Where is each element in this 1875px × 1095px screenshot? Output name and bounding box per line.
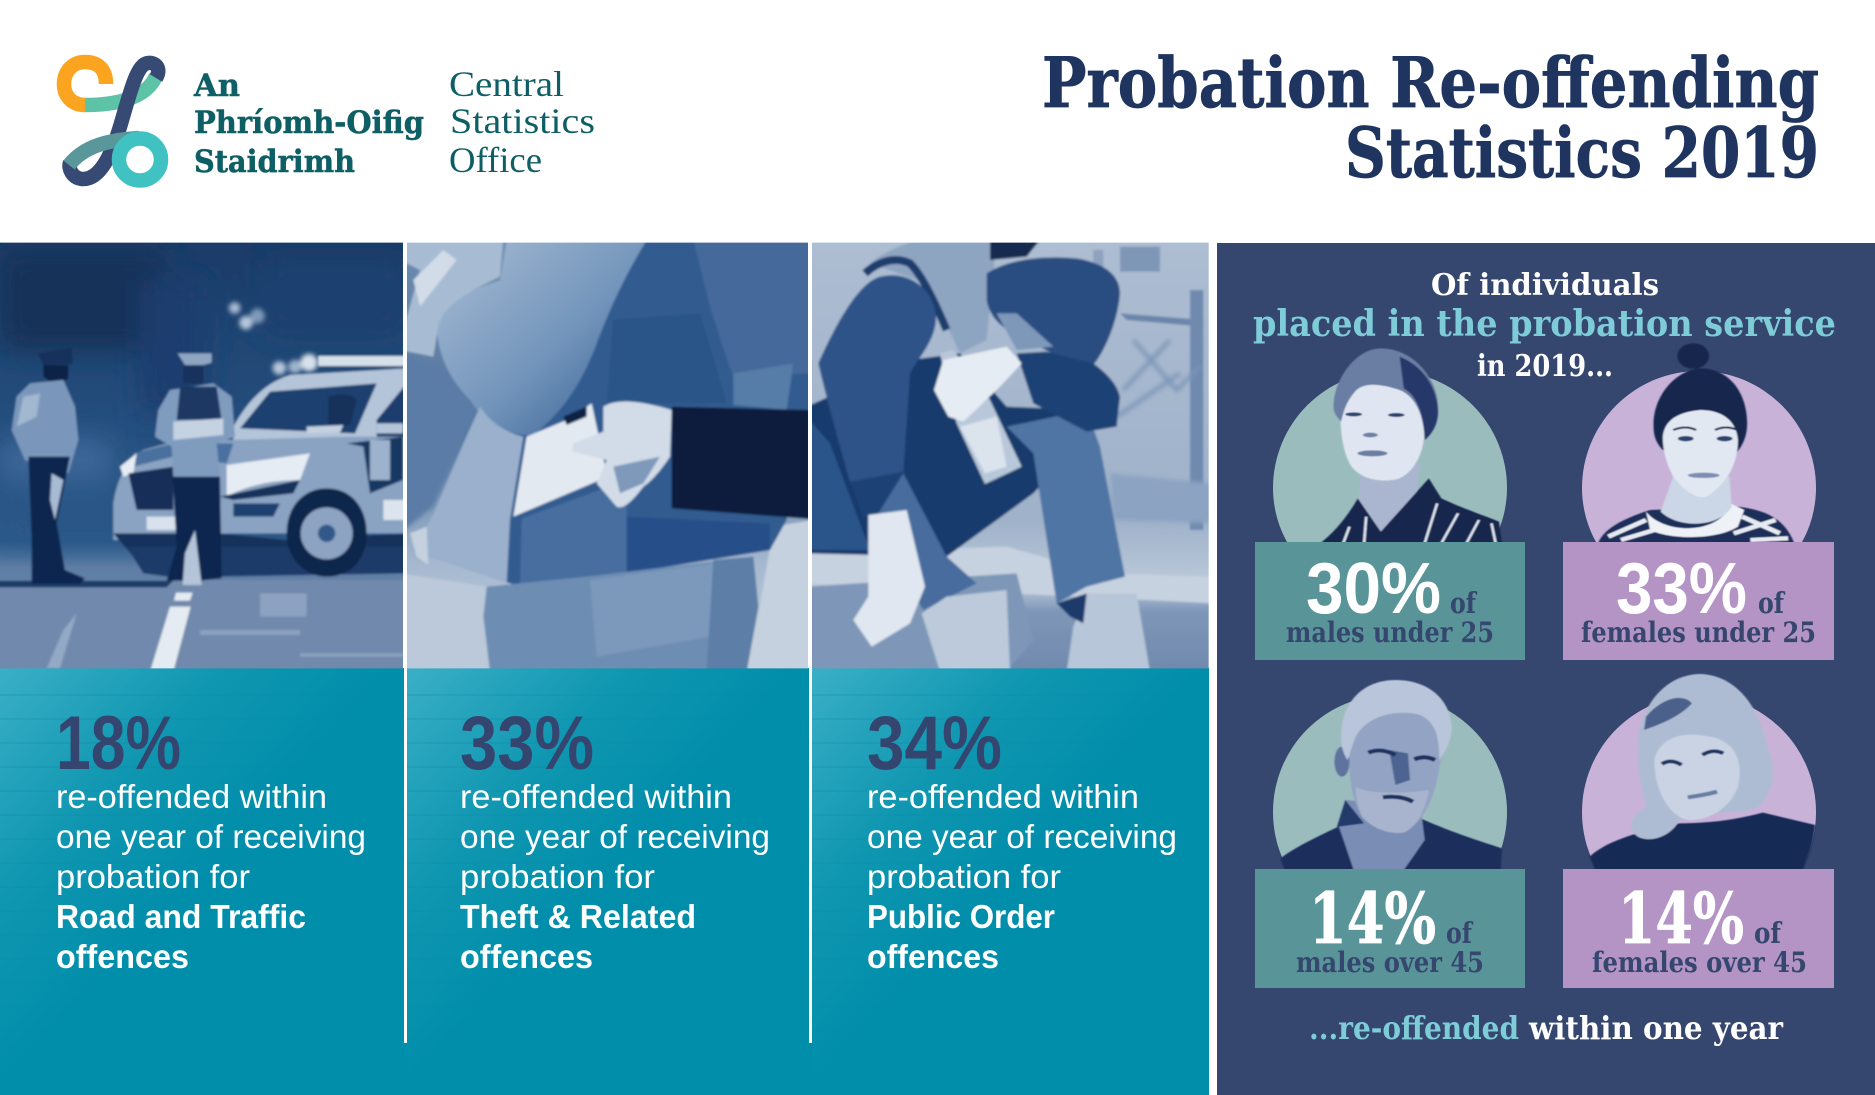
- hand lower: [853, 510, 925, 647]
- statistic: theft and related offences: one year of receiving: [460, 818, 770, 855]
- heading: of individuals placed in the probation service: in 2019...: [1477, 349, 1613, 384]
- statistic: road and traffic offences: re-offended within: [56, 778, 327, 815]
- jeans: [483, 557, 758, 672]
- stat box: females under 25: females under 25: [1581, 616, 1816, 649]
- statistic: theft and related offences: offences: [460, 938, 593, 975]
- statistic: public order offences: 34%: [867, 701, 1002, 786]
- footer text: re-offended within one year: [1309, 1009, 1784, 1047]
- panel: teal statistics background: [0, 668, 1209, 1095]
- stat box: females under 25: [1563, 542, 1834, 660]
- arm over knee: [1017, 352, 1120, 432]
- logo text: English name: Central: [449, 64, 564, 104]
- logo text: Irish name: [193, 68, 424, 180]
- logo text: Irish name: Phríomh-Oifig: [194, 105, 424, 141]
- statistic: theft and related offences: probation for: [460, 858, 655, 895]
- jacket sleeve and chest: [400, 240, 647, 435]
- statistic: public order offences: Public Order: [867, 898, 1055, 935]
- portrait: older woman: [1582, 674, 1816, 870]
- jacket body: [506, 242, 808, 586]
- statistic: public order offences: offences: [867, 938, 999, 975]
- hand: [572, 401, 672, 507]
- portrait: young man: [1273, 348, 1507, 543]
- logo text: English name: Statistics: [450, 101, 595, 141]
- stat box: females over 45: [1563, 869, 1834, 988]
- statistic: public order offences: one year of receiving: [867, 818, 1177, 855]
- statistic: public order offences: probation for: [867, 858, 1061, 895]
- hand with bottle: [934, 347, 1022, 422]
- statistic: road and traffic offences: probation for: [56, 858, 250, 895]
- boots: [922, 590, 1150, 672]
- stat box: females over 45: females over 45: [1592, 946, 1807, 979]
- black sleeve: [672, 407, 813, 519]
- icon: knot symbol: [64, 62, 161, 180]
- dark jeans and body: [812, 352, 1058, 558]
- statistic: road and traffic offences: offences: [56, 938, 189, 975]
- statistic: road and traffic offences: 18%: [56, 701, 181, 786]
- photo: pickpocket taking a phone: [400, 240, 813, 672]
- bottle: [940, 350, 1022, 484]
- statistic: public order offences: [867, 701, 1177, 975]
- panel: demographics: [1217, 243, 1875, 1095]
- title: [1042, 43, 1819, 194]
- officer left: [12, 347, 85, 584]
- road: [0, 580, 407, 672]
- logo text: Irish name: An: [193, 68, 240, 104]
- stat box: males under 25: [1255, 542, 1525, 660]
- stat box: females under 25: of: [1758, 586, 1786, 620]
- heading: of individuals placed in the probation service: placed in the probation service: [1253, 303, 1836, 345]
- heading: of individuals placed in the probation service: [1253, 268, 1836, 384]
- portrait: older man: [1273, 680, 1507, 870]
- sleeve: [807, 275, 936, 550]
- stat box: males under 25: males under 25: [1286, 616, 1494, 649]
- statistic: theft and related offences: [460, 701, 770, 975]
- heading: of individuals placed in the probation service: Of individuals: [1431, 268, 1659, 303]
- statistic: theft and related offences: re-offended within: [460, 778, 732, 815]
- logo: Central Statistics Office: [64, 62, 595, 180]
- statistic: theft and related offences: 33%: [460, 701, 594, 786]
- photo: police road checkpoint: [0, 240, 407, 672]
- stat box: females over 45: 14%: [1618, 877, 1744, 960]
- hood: [987, 257, 1120, 368]
- stat box: males over 45: 14%: [1309, 877, 1436, 960]
- vest: [865, 240, 1040, 353]
- photo: hooded person with bottle: [807, 240, 1213, 672]
- statistic: road and traffic offences: [56, 701, 366, 975]
- logo text: English name: [449, 64, 595, 180]
- officer right: [155, 353, 235, 585]
- footer text: re-offended within one year: ...re-offended: [1309, 1009, 1519, 1047]
- jacket lower left: [410, 407, 627, 587]
- statistic: theft and related offences: Theft & Related: [460, 898, 696, 935]
- stat box: males over 45: of: [1446, 916, 1474, 950]
- lower left leg: [870, 473, 977, 610]
- footer text: re-offended within one year: within one year: [1528, 1009, 1784, 1047]
- statistic: public order offences: re-offended within: [867, 778, 1139, 815]
- logo text: Irish name: Staidrimh: [194, 144, 355, 180]
- stat box: males under 25: 30%: [1306, 549, 1441, 629]
- stat box: males over 45: males over 45: [1296, 946, 1484, 979]
- stat box: females under 25: 33%: [1616, 549, 1747, 629]
- police car: [113, 356, 407, 577]
- stat box: males over 45: [1255, 869, 1525, 988]
- phone: [513, 403, 607, 517]
- stat box: males under 25: of: [1450, 586, 1478, 620]
- statistic: road and traffic offences: one year of receiving: [56, 818, 366, 855]
- portrait: young woman: [1582, 343, 1816, 543]
- logo text: English name: Office: [449, 140, 542, 180]
- statistic: road and traffic offences: Road and Traffic: [56, 898, 306, 935]
- right leg: [1007, 410, 1125, 603]
- stat box: females over 45: of: [1754, 916, 1783, 950]
